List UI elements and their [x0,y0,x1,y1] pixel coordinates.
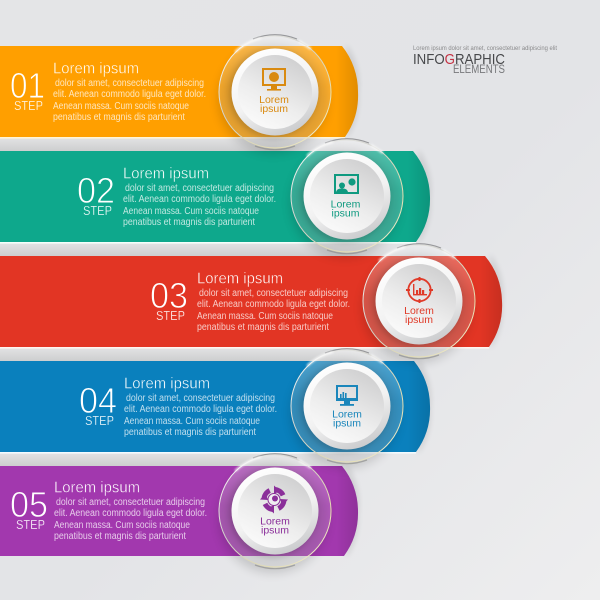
icon: cycle arrows around eye [260,486,288,514]
title block: Lorem ipsum dolor sit amet, consectetuer adipiscing elit [413,45,557,52]
text block: step 2: Lorem ipsum [123,166,209,182]
text block: step 1: dolor sit amet, consectetuer adipiscing [55,78,204,89]
label [259,94,289,115]
text block: step 2: 02 [77,170,115,211]
title block [413,45,557,76]
text block: step 3: STEP [156,308,185,323]
text block: step 2: Aenean massa. Cum sociis natoque [123,206,259,217]
icon: presentation board with person [334,174,359,194]
text block: step 4: Lorem ipsum [124,376,210,392]
label [332,409,362,430]
shadow bands between the bars [0,137,415,466]
text block: step 4: Aenean massa. Cum sociis natoque [124,416,260,427]
badge: step 4 glass disc [290,349,403,468]
text block: step 1: Aenean massa. Cum sociis natoque [53,101,189,112]
text block: step 1: Lorem ipsum [53,60,139,78]
label: ipsum [331,208,360,220]
label [404,305,434,326]
label: Lorem [332,409,362,421]
icon: monitor with bar chart [336,385,358,406]
text block: step 3: dolor sit amet, consectetuer adipiscing [199,288,348,299]
badge: step 3 glass disc [362,244,475,363]
text block: step 4: STEP [85,413,114,428]
text block: step 4: dolor sit amet, consectetuer adipiscing [126,393,275,404]
label: Lorem [260,515,290,527]
label: Lorem [404,305,434,317]
text block: step 3: elit. Aenean commodo ligula eget dolor. [197,299,350,310]
badge: step 2 glass disc [290,139,403,258]
text block: step 2: STEP [83,203,112,218]
panel: step 3 bar [0,254,503,349]
text block: step 5: dolor sit amet, consectetuer adipiscing [56,497,205,508]
text block: step 1: STEP [14,98,43,113]
panel: step 1 bar [0,44,359,139]
text block: step 5: Aenean massa. Cum sociis natoque [54,520,190,531]
text block: step 5: Lorem ipsum [54,480,140,496]
label [260,515,290,536]
text block: step 5: STEP [16,517,45,532]
text block: step 5: 05 [10,484,48,525]
text block: step 1: 01 [10,65,45,106]
icon: target with bar chart [406,277,433,303]
text block: step 1 [10,60,206,123]
text block: step 4: elit. Aenean commodo ligula eget dolor. [124,404,277,415]
text block: step 3: penatibus et magnis dis parturient [197,322,329,333]
text block: step 4: penatibus et magnis dis parturient [124,427,256,438]
text block: step 3: Lorem ipsum [197,270,283,288]
label [331,199,361,220]
text block: step 3: 03 [150,275,188,316]
label: ipsum [333,418,361,430]
text block: step 5 [10,480,207,542]
icon: monitor with pie chart [262,68,286,91]
text block: step 4: 04 [79,380,117,421]
text block: step 3 [150,270,350,333]
label: Lorem [259,94,289,106]
panel: step 4 bar [0,359,431,454]
text block: step 2: penatibus et magnis dis parturient [123,217,255,228]
text block: step 4 [79,376,277,438]
text block: step 2 [77,166,276,228]
text block: step 1: penatibus et magnis dis parturient [53,112,185,123]
text block: step 2: elit. Aenean commodo ligula eget dolor. [123,194,276,205]
title block: INFOGRAPHIC [413,51,505,68]
badge: step 1 glass disc [218,35,331,154]
text block: step 1: elit. Aenean commodo ligula eget dolor. [53,89,206,100]
label: ipsum [405,314,433,326]
label: Lorem [331,199,361,211]
text block: step 5: penatibus et magnis dis parturient [54,531,186,542]
title block: ELEMENTS [453,64,505,76]
panel: step 5 bar [0,464,359,558]
text block: step 5: elit. Aenean commodo ligula eget dolor. [54,508,207,519]
badge: step 5 glass disc [218,454,331,573]
panel: step 2 bar [0,149,431,244]
label: ipsum [260,103,288,115]
text block: step 3: Aenean massa. Cum sociis natoque [197,311,333,322]
text block: step 2: dolor sit amet, consectetuer adipiscing [125,183,274,194]
label: ipsum [261,524,289,536]
